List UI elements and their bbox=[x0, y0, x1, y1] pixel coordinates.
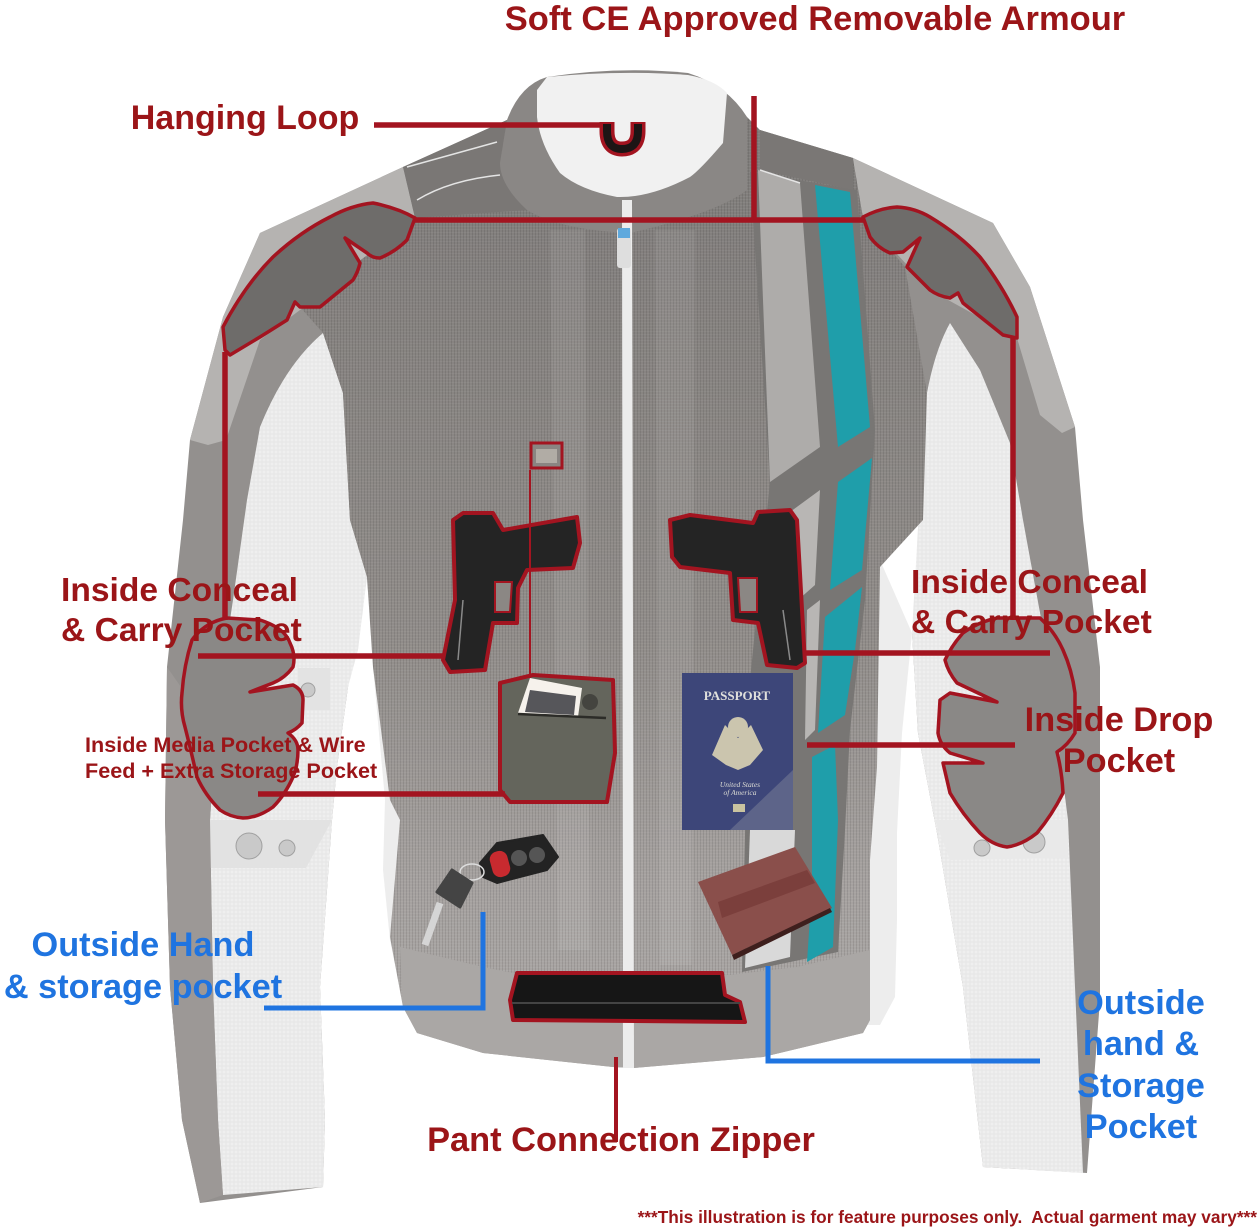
right sleeve bbox=[853, 158, 1100, 1173]
left sleeve bbox=[165, 167, 403, 1203]
line: left elbow armour bbox=[222, 352, 228, 620]
label: outside hand pocket: Outside Hand bbox=[32, 926, 254, 964]
armour: left shoulder bbox=[223, 203, 415, 355]
line: pant zipper bbox=[614, 1057, 618, 1142]
left yoke bbox=[403, 120, 527, 218]
jacket body bbox=[300, 117, 927, 1068]
body hem band bbox=[400, 947, 870, 1068]
center zipper bbox=[622, 200, 634, 1068]
line: left concealed pocket bbox=[198, 653, 445, 659]
right yoke bbox=[760, 130, 853, 190]
label: outside storage pocket: hand & bbox=[1083, 1025, 1199, 1063]
callout lines bbox=[198, 96, 1050, 1142]
zipper pull bbox=[617, 228, 631, 268]
body mesh texture bbox=[300, 117, 927, 1068]
label: drop pocket: Inside Drop bbox=[1025, 701, 1213, 739]
line: right elbow armour bbox=[1010, 338, 1016, 620]
label: pant zipper: Pant Connection Zipper bbox=[427, 1121, 815, 1159]
label: drop pocket: Pocket bbox=[1063, 742, 1175, 780]
passport eagle bbox=[712, 717, 763, 770]
label: left conceal pocket bbox=[61, 572, 302, 649]
label: right conceal pocket bbox=[911, 564, 1152, 641]
disclaimer: ***This illustration is for feature purposes only. Actual garment may vary*** bbox=[638, 1207, 1257, 1227]
line: hanging loop bbox=[374, 122, 602, 128]
passport: PASSPORT bbox=[704, 688, 771, 703]
light panel lattice bbox=[785, 490, 820, 740]
white panel lower bbox=[745, 830, 795, 968]
label: media pocket: Inside Media Pocket & Wire bbox=[85, 732, 366, 757]
label: media pocket: Feed + Extra Storage Pocket bbox=[85, 758, 377, 783]
label: outside hand pocket bbox=[4, 926, 282, 1006]
label: right conceal pocket: Inside Conceal bbox=[911, 564, 1148, 601]
armour: left elbow bbox=[181, 618, 303, 818]
label: outside storage pocket: Pocket bbox=[1085, 1108, 1197, 1146]
label: left conceal pocket: Inside Conceal bbox=[61, 572, 298, 609]
right cuff panel bbox=[935, 820, 1068, 860]
phone bbox=[518, 678, 582, 717]
media pocket bbox=[500, 675, 615, 802]
passport bbox=[682, 673, 793, 830]
wallet bbox=[698, 847, 832, 960]
body white edges bbox=[367, 560, 912, 1025]
snaps on sleeves bbox=[236, 668, 1045, 859]
armour: right elbow bbox=[938, 618, 1075, 847]
label: drop pocket bbox=[1025, 701, 1213, 780]
line: armour bbox=[413, 96, 865, 220]
collar inner lining bbox=[537, 73, 727, 197]
stripes dark base bbox=[742, 172, 875, 972]
line: right concealed pocket bbox=[805, 650, 1050, 656]
left cuff panel bbox=[210, 820, 332, 868]
label: left conceal pocket: & Carry Pocket bbox=[61, 612, 302, 649]
label: outside storage pocket: Outside bbox=[1077, 984, 1205, 1022]
light panel upper bbox=[758, 170, 820, 482]
label: outside storage pocket bbox=[1077, 984, 1205, 1146]
left sleeve white panel bbox=[210, 333, 367, 1195]
line: outside hand pocket left bbox=[264, 912, 483, 1008]
wire feed hole bbox=[531, 443, 562, 468]
vertical lighter seam bands bbox=[550, 230, 695, 965]
pant connection zipper bbox=[510, 973, 745, 1022]
yoke highlight lines bbox=[407, 142, 800, 200]
line: outside pocket right bbox=[768, 966, 1040, 1061]
title: armour: Soft CE Approved Removable Armour bbox=[505, 0, 1125, 38]
keys bbox=[425, 835, 558, 945]
left pistol bbox=[443, 513, 580, 672]
line: media pocket bbox=[258, 791, 505, 797]
left shoulder light panel bbox=[190, 167, 415, 445]
collar knit bbox=[500, 70, 747, 233]
label: outside hand pocket: & storage pocket bbox=[4, 968, 282, 1006]
label: hanging loop: Hanging Loop bbox=[131, 99, 359, 137]
armour: right shoulder bbox=[863, 207, 1017, 338]
passport: of America bbox=[724, 788, 757, 797]
hanging loop icon bbox=[607, 122, 638, 149]
right sleeve white panel bbox=[912, 323, 1083, 1173]
label: right conceal pocket: & Carry Pocket bbox=[911, 604, 1152, 641]
right shoulder light panel bbox=[853, 158, 1075, 433]
label: media pocket bbox=[85, 732, 377, 783]
teal stripe segments bbox=[807, 185, 872, 962]
line: drop pocket bbox=[807, 742, 1015, 748]
right pistol bbox=[670, 510, 805, 668]
passport: United States bbox=[720, 780, 760, 789]
label: outside storage pocket: Storage bbox=[1077, 1067, 1205, 1105]
line: wire feed bbox=[529, 470, 531, 678]
left sleeve cuff gray bbox=[165, 667, 223, 1203]
